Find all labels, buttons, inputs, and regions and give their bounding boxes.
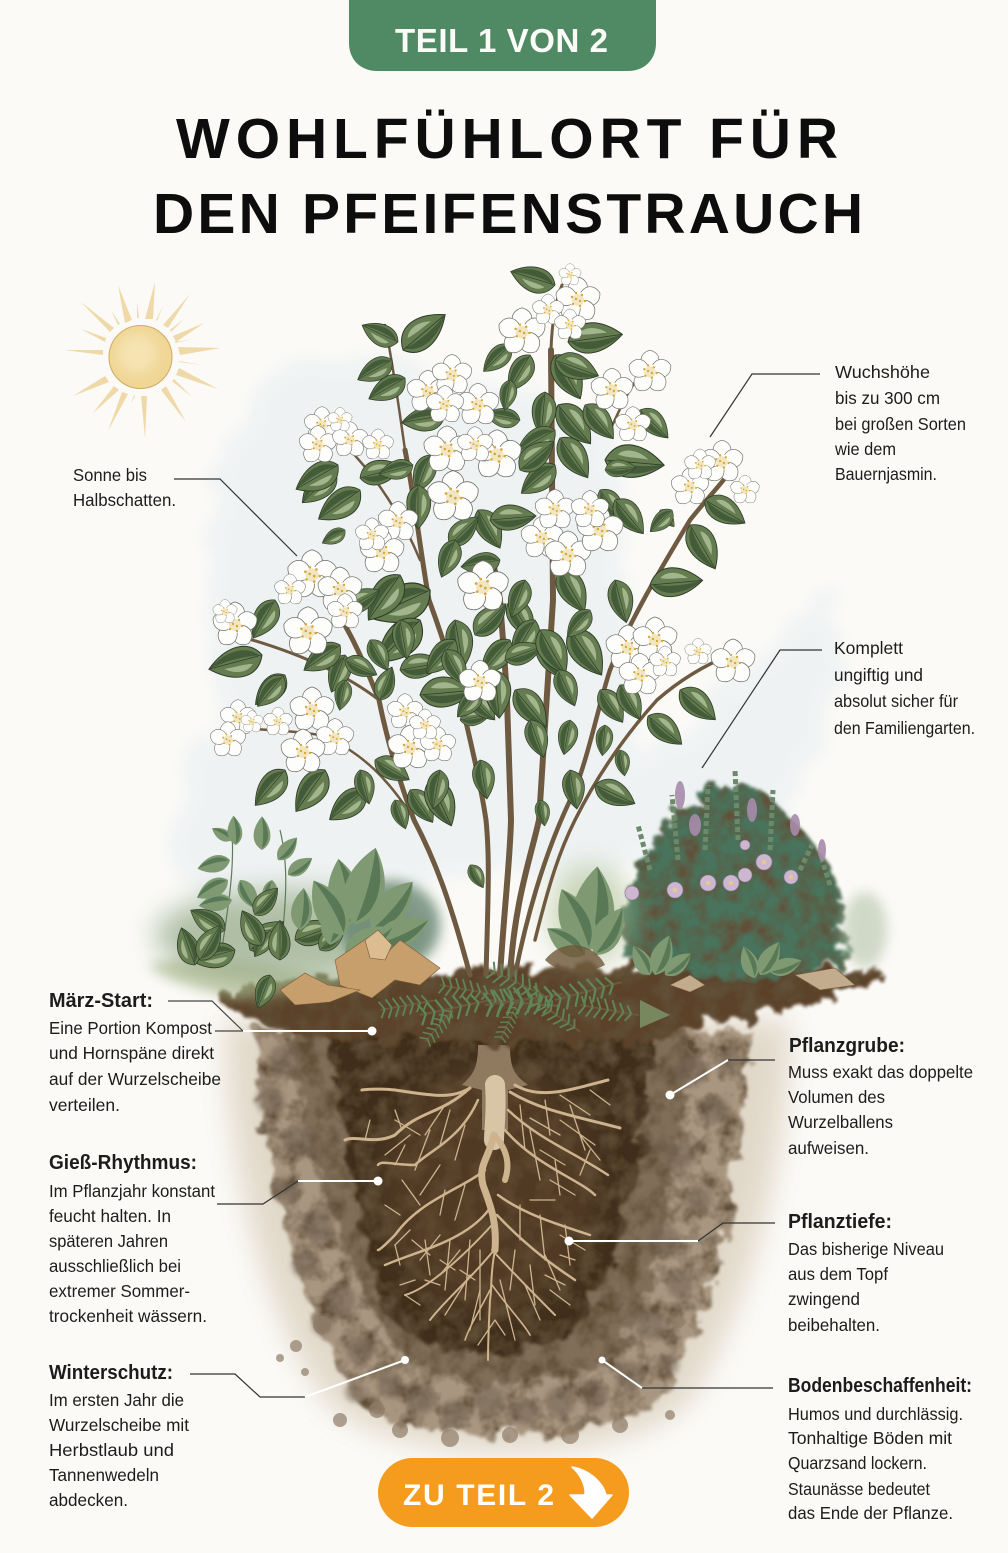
companion plants right with lilac flowers bbox=[541, 770, 887, 981]
text: soil condition: Tonhaltige Böden mit bbox=[788, 1428, 952, 1448]
text: planting depth: aus dem Topf bbox=[788, 1264, 888, 1284]
text: non-toxic: ungiftig und bbox=[834, 665, 923, 685]
icon: curved down arrow bbox=[570, 1467, 612, 1518]
text: sun label: Halbschatten. bbox=[73, 490, 176, 510]
text: planting pit: Wurzelballens bbox=[788, 1112, 893, 1132]
text: soil condition: Bodenbeschaffenheit: bbox=[788, 1375, 972, 1397]
text: non-toxic: absolut sicher für bbox=[834, 691, 958, 711]
text: planting depth: Das bisherige Niveau bbox=[788, 1239, 944, 1259]
leader: planting depth bbox=[564, 1223, 775, 1246]
text: soil condition: das Ende der Pflanze. bbox=[788, 1503, 953, 1523]
title: DEN PFEIFENSTRAUCH bbox=[153, 182, 863, 246]
text: soil condition: Staunässe bedeutet bbox=[788, 1479, 930, 1499]
text: watering rhythm bbox=[49, 1152, 215, 1326]
leader: sun label bbox=[174, 479, 297, 556]
text: planting pit: Muss exakt das doppelte bbox=[788, 1062, 973, 1082]
text: watering rhythm: trockenheit wässern. bbox=[49, 1306, 207, 1326]
text: non-toxic: den Familiengarten. bbox=[834, 718, 975, 738]
text: soil condition: Humos und durchlässig. bbox=[788, 1404, 963, 1424]
header badge: part 1 of 2: TEIL 1 VON 2 bbox=[395, 22, 608, 59]
text: winter protection: Wurzelscheibe mit bbox=[49, 1415, 189, 1435]
text: sun label bbox=[73, 465, 176, 510]
text: planting depth bbox=[788, 1211, 944, 1335]
button: to part 2 bbox=[378, 1458, 629, 1527]
text: winter protection: Herbstlaub und bbox=[49, 1440, 174, 1460]
text: march start bbox=[49, 990, 221, 1115]
leader: winter protection bbox=[190, 1356, 409, 1397]
plant stems bbox=[235, 285, 735, 975]
text: watering rhythm: extremer Sommer- bbox=[49, 1281, 190, 1301]
text: watering rhythm: Im Pflanzjahr konstant bbox=[49, 1181, 215, 1201]
leader: growth height label bbox=[710, 374, 820, 437]
text: growth height: Wuchshöhe bbox=[835, 362, 930, 382]
text: watering rhythm: späteren Jahren bbox=[49, 1231, 168, 1251]
leader: march start bbox=[168, 1001, 376, 1036]
text: winter protection: Tannenwedeln bbox=[49, 1465, 159, 1485]
soil section with planting pit bbox=[225, 1020, 790, 1452]
surface soil band bbox=[148, 958, 885, 1041]
title: WOHLFÜHLORT FÜR bbox=[176, 107, 838, 171]
text: watering rhythm: Gieß-Rhythmus: bbox=[49, 1152, 197, 1174]
text: soil condition bbox=[788, 1375, 972, 1523]
text: sun label: Sonne bis bbox=[73, 465, 147, 485]
header badge: part 1 of 2 bbox=[349, 0, 656, 71]
text: growth height: bis zu 300 cm bbox=[835, 388, 940, 408]
text: soil condition: Quarzsand lockern. bbox=[788, 1453, 927, 1473]
text: growth height: bei großen Sorten bbox=[835, 414, 966, 434]
text: planting pit bbox=[788, 1035, 973, 1158]
text: non-toxic bbox=[834, 638, 975, 738]
text: march start: auf der Wurzelscheibe bbox=[49, 1069, 221, 1089]
text: winter protection: abdecken. bbox=[49, 1490, 128, 1510]
text: watering rhythm: feucht halten. In bbox=[49, 1206, 171, 1226]
text: winter protection bbox=[49, 1362, 189, 1510]
text: planting depth: beibehalten. bbox=[788, 1315, 880, 1335]
text: planting pit: Volumen des bbox=[788, 1087, 885, 1107]
text: march start: und Hornspäne direkt bbox=[49, 1043, 214, 1063]
text: growth height: Bauernjasmin. bbox=[835, 464, 937, 484]
text: planting pit: Pflanzgrube: bbox=[789, 1035, 905, 1057]
text: growth height bbox=[834, 362, 966, 484]
foliage bbox=[205, 260, 752, 891]
title bbox=[153, 107, 863, 246]
leader: planting pit bbox=[666, 1060, 775, 1100]
text: march start: März-Start: bbox=[49, 990, 153, 1012]
text: winter protection: Im ersten Jahr die bbox=[49, 1390, 184, 1410]
text: winter protection: Winterschutz: bbox=[49, 1362, 173, 1384]
text: march start: verteilen. bbox=[49, 1095, 120, 1115]
leader: non-toxic label bbox=[702, 650, 822, 768]
root system bbox=[345, 1045, 620, 1360]
leader: soil condition bbox=[598, 1356, 773, 1388]
white blossoms bbox=[208, 264, 761, 776]
text: planting depth: Pflanztiefe: bbox=[788, 1211, 892, 1233]
fir branches on soil bbox=[378, 961, 670, 1047]
text: growth height: wie dem bbox=[834, 439, 896, 459]
watercolor sky wash bbox=[172, 356, 841, 900]
text: planting pit: aufweisen. bbox=[788, 1138, 869, 1158]
text: march start: Eine Portion Kompost bbox=[49, 1018, 212, 1038]
sun illustration bbox=[64, 282, 221, 438]
companion plants left bbox=[155, 815, 440, 1012]
text: watering rhythm: ausschließlich bei bbox=[49, 1256, 181, 1276]
button: to part 2: ZU TEIL 2 bbox=[403, 1479, 554, 1512]
text: planting depth: zwingend bbox=[788, 1289, 860, 1309]
text: non-toxic: Komplett bbox=[834, 638, 903, 658]
leader: watering rhythm bbox=[217, 1176, 382, 1204]
dead leaves mulch bbox=[280, 930, 855, 1005]
